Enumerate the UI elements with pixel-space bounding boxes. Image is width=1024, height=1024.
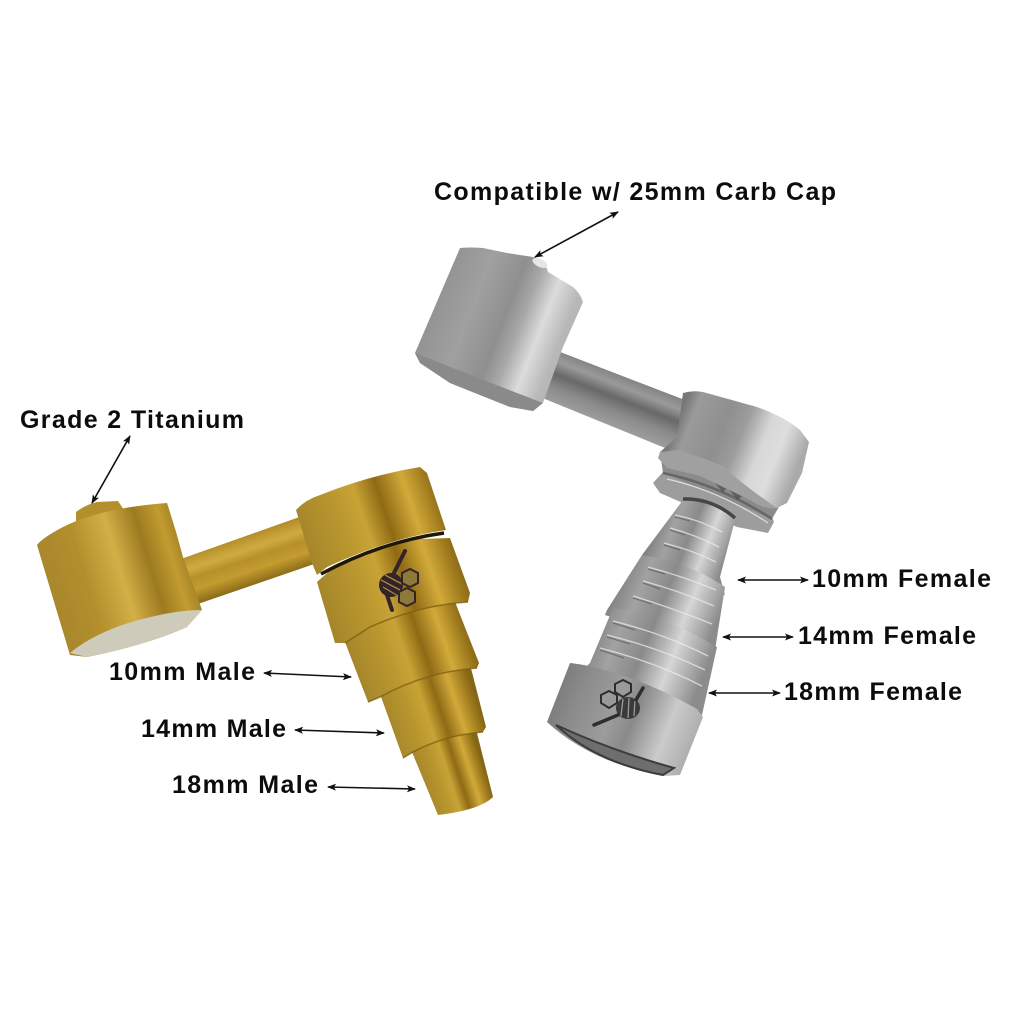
- gold bucket cap: [76, 501, 124, 525]
- silver thread lines: [663, 462, 772, 523]
- label: 10mm female: 10mm Female: [812, 565, 991, 593]
- silver threaded flange: [653, 472, 774, 533]
- silver grooves: [600, 515, 722, 686]
- silver collar: [660, 391, 809, 508]
- label: grade 2 titanium: [20, 406, 244, 503]
- label: compatible with carb cap: [434, 178, 836, 257]
- label: 14mm female: 14mm Female: [798, 622, 976, 650]
- label: 18mm male: 18mm Male: [172, 771, 318, 799]
- silver cone tier A: [640, 500, 735, 595]
- label: compatible with carb cap: Compatible w/ 25mm Carb Cap: [434, 178, 836, 206]
- gold tier 3: [375, 650, 486, 758]
- silver stem: [535, 350, 690, 452]
- silver thread section: [660, 452, 780, 519]
- gold bucket bottom face: [70, 610, 202, 657]
- silver cone tier B: [605, 555, 725, 650]
- gold logo: [379, 551, 418, 610]
- label: 14mm male: [141, 715, 384, 743]
- gold top collar: [296, 467, 446, 575]
- silver bucket rim: [415, 353, 543, 411]
- silver bucket: [415, 248, 583, 411]
- gold tier lips: [345, 602, 483, 758]
- silver nail: [415, 248, 809, 776]
- gold tier 2: [345, 590, 479, 702]
- label: 18mm female: 18mm Female: [784, 678, 962, 706]
- gold stem: [178, 515, 320, 606]
- label: 14mm male: 14mm Male: [141, 715, 286, 743]
- silver bottom ring: [547, 663, 703, 776]
- silver groove shadows: [600, 517, 690, 658]
- gold collar gap: [321, 533, 444, 574]
- silver upper plate: [658, 449, 780, 508]
- label: grade 2 titanium: Grade 2 Titanium: [20, 406, 244, 434]
- gold tier 4: [405, 718, 493, 815]
- label: 10mm male: 10mm Male: [109, 658, 255, 686]
- silver cone tier C: [585, 608, 717, 715]
- silver logo: [594, 680, 643, 725]
- gold nail: [37, 467, 493, 815]
- gold bucket: [37, 503, 202, 657]
- silver bucket cap highlight: [531, 256, 549, 270]
- silver opening: [556, 725, 674, 775]
- gold tier 1: [317, 538, 470, 643]
- label: 10mm male: [109, 658, 351, 686]
- silver neck shadow: [683, 499, 735, 518]
